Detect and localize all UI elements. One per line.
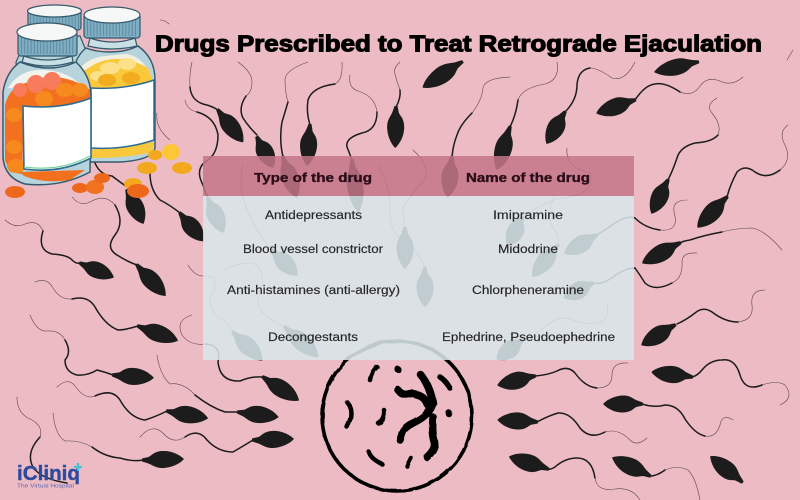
sperm table right [491, 303, 608, 366]
row blood vessel constrictor: Midodrine [498, 244, 558, 256]
sperm head top 12 [652, 54, 701, 80]
sperm left 3 [35, 280, 181, 349]
sperm right 3 [560, 200, 687, 261]
sperm lower right 5 [506, 449, 640, 500]
sperm right 1 [644, 98, 719, 218]
yellow pill bottle [74, 7, 155, 162]
illustration: pill bottles [3, 5, 192, 198]
sperm top 3 [275, 62, 308, 201]
sperm table left 1 [188, 265, 268, 367]
sperm left 2 [72, 197, 172, 302]
sperm lower right 3 [603, 395, 733, 436]
sperm top 11 [593, 77, 743, 121]
table body [203, 196, 634, 360]
sperm right 6 [637, 290, 765, 353]
sperm left 6 [157, 355, 280, 425]
sperm left 7 [140, 429, 294, 452]
sperm right 5 [560, 253, 697, 306]
back bottle [16, 5, 90, 110]
logo tagline: The Virtual Hospital [17, 484, 74, 490]
sperm right 4 [638, 228, 782, 271]
sperm top 5 [344, 75, 377, 214]
loose pills [5, 144, 192, 198]
column headings: Type of the drug [254, 170, 372, 185]
column headings [254, 170, 590, 185]
sperm lower right 4 [497, 411, 647, 443]
title: Drugs Prescribed to Treat Retrograde Ejaculation [155, 30, 762, 56]
row antidepressants: Antidepressants [265, 210, 362, 222]
sperm top 4 [299, 62, 342, 166]
sperm left 9 tail behind logo [17, 397, 67, 483]
yellow bottle label [91, 80, 154, 148]
sperm top 2 [238, 62, 281, 172]
row anti-histamines: Anti-histamines (anti-allergy) [227, 285, 400, 297]
sperm left of table [185, 100, 231, 236]
logo plus sign [74, 463, 82, 471]
row anti-histamines [227, 285, 584, 297]
sperm head lower right 7 [705, 450, 748, 489]
sperm under table 6 [223, 263, 324, 364]
sperm lower right 6 [608, 450, 700, 500]
sperm under table 4 [526, 195, 565, 282]
table header band [203, 156, 634, 196]
sperm left 10 [180, 315, 304, 408]
sperm lower right 1 [495, 363, 628, 394]
sperm top 6 [387, 62, 405, 148]
sperm under table 2 [378, 165, 434, 307]
row decongestants: Decongestants [268, 332, 358, 344]
row antidepressants: Imipramine [493, 210, 563, 222]
row decongestants: Ephedrine, Pseudoephedrine [442, 332, 615, 344]
egg nucleus fragments [347, 367, 450, 466]
sperm top 9 [489, 62, 558, 173]
sperm by pills 1 [95, 163, 151, 228]
row blood vessel constrictor: Blood vessel constrictor [243, 244, 383, 256]
stray tails [157, 20, 793, 140]
sperm lower right 2 [650, 360, 789, 405]
sperm left 4 [30, 315, 154, 386]
row blood vessel constrictor [243, 244, 558, 256]
orange pill bottle [3, 23, 91, 185]
egg membrane [322, 341, 472, 491]
sperm top 8 [439, 77, 510, 199]
row antidepressants [265, 210, 563, 222]
sperm head top 7 [418, 54, 468, 95]
sperm top 1 [190, 62, 250, 148]
column headings: Name of the drug [466, 170, 590, 185]
sperm left 1 [5, 220, 117, 285]
sperm under table 1 [396, 150, 426, 269]
orange bottle label [23, 98, 91, 170]
row anti-histamines: Chlorpheneramine [472, 285, 584, 297]
egg cell [322, 341, 472, 491]
row decongestants [268, 332, 615, 344]
sperm left 5 [57, 382, 210, 427]
sperm left 8 [53, 413, 184, 469]
sperm top 10 [539, 62, 635, 148]
logo: iCliniq: iCliniq [17, 463, 80, 485]
sperm right 2 [691, 125, 788, 234]
sperm under table 3 [500, 148, 591, 250]
drug table [203, 156, 634, 360]
sperm under table 5 [241, 165, 304, 282]
sperm by pills 2 [150, 173, 210, 247]
